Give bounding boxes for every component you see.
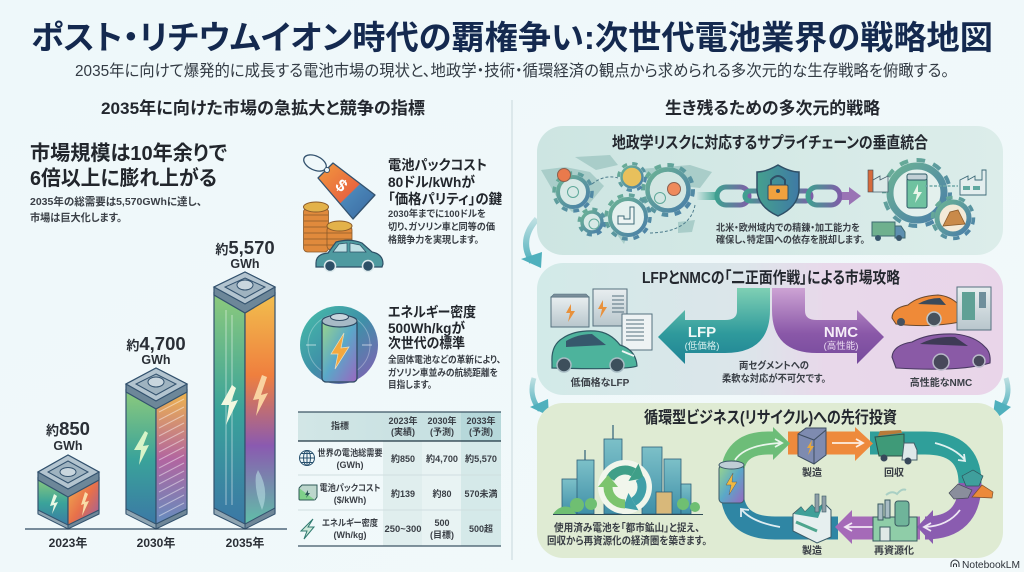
icon: factory right (960, 170, 986, 195)
table row: energy density: 500 (434, 518, 450, 528)
panel description: 確保し、特定国への依存を脱却します。 (716, 234, 865, 246)
icon: green car (552, 331, 637, 372)
icon: price tag with coins and car (301, 152, 383, 272)
table row: energy density: (Wh/kg) (334, 530, 366, 540)
loop white highlights (735, 439, 965, 531)
table header: (実績) (391, 426, 415, 437)
icon: LFP batteries (551, 289, 652, 350)
icon: battery cell (798, 428, 826, 464)
left section heading: 2035年に向けた市場の急拡大と競争の指標 (101, 98, 425, 118)
text: energy density: ガソリン車並みの航続距離を (388, 367, 498, 379)
text: pack cost: 電池パックコスト (388, 157, 487, 173)
table row: demand: 約4,700 (426, 453, 458, 464)
year axis labels: 2035年 (226, 535, 264, 550)
text: energy density: 全固体電池などの革新により、 (388, 354, 501, 366)
subtitle: 2035年に向けて爆発的に成長する電池市場の現状と、地政学・技術・循環経済の観点から求められる多次元的な生存戦略を俯瞰する。 (75, 62, 949, 80)
arrow: LFP: (低価格) (685, 340, 719, 352)
bar: 2023 battery (38, 455, 99, 529)
icon: truck (875, 430, 917, 464)
icon: city skyline with recycling symbol (553, 425, 703, 515)
label: manufacture bottom: 製造 (802, 544, 822, 557)
panel: recycling (537, 403, 1003, 558)
bar: 2030 battery (126, 368, 187, 529)
bar value labels: 約5,570 (215, 237, 275, 258)
table header: 2030年 (427, 415, 457, 426)
icon: gears right with battery (884, 160, 974, 238)
text: energy density: 目指します。 (388, 379, 432, 391)
panel heading: 地政学リスクに対応するサプライチェーンの垂直統合 (612, 133, 928, 152)
arrow: NMC (772, 288, 884, 364)
description: 使用済み電池を「都市鉱山」と捉え、 (554, 521, 700, 534)
label: collection: 回収 (884, 467, 904, 479)
bar value labels: GWh (53, 439, 83, 453)
icon: price tag with coins and car: $ (332, 175, 351, 196)
recycling loop (732, 443, 970, 528)
table: indicators (298, 412, 501, 546)
table row: pack cost: 電池パックコスト (320, 482, 380, 493)
table row: demand: 世界の電池総需要 (318, 447, 382, 458)
text: energy density: 次世代の標準 (388, 335, 465, 351)
year axis labels: 2023年 (49, 535, 87, 550)
icon: dashed flow arrow (925, 185, 958, 187)
right section heading: 生き残るための多次元的戦略 (665, 98, 880, 118)
market description: 2035年の総需要は5,570GWhに達し、 (30, 195, 202, 208)
bar value labels: GWh (230, 257, 260, 271)
table header: 2033年 (466, 415, 496, 426)
table row: demand: 約5,570 (465, 453, 497, 464)
logo: NotebookLM: NotebookLM (962, 560, 1020, 571)
world map (541, 155, 712, 244)
year axis labels (49, 535, 264, 550)
arrow: panel 1 to panel 2 (521, 219, 542, 268)
icon: charging cabinet (957, 287, 991, 330)
table row: energy density: エネルギー密度 (322, 517, 378, 528)
table row: demand (318, 447, 497, 470)
text: pack cost: 切り、ガソリン車と同等の価 (388, 221, 495, 233)
market heading: 6倍以上に膨れ上がる (30, 166, 217, 190)
market heading: 市場規模は10年余りで (30, 142, 227, 165)
icon: globe (300, 450, 314, 466)
connector dashes (592, 177, 695, 233)
text: pack cost: 80ドル/kWhが (388, 174, 475, 190)
text: energy density (388, 304, 501, 391)
table header: 2023年 (388, 415, 418, 426)
bar value labels: 約4,700 (126, 333, 186, 354)
table row: energy density: 500超 (469, 523, 493, 534)
label: recycling materials: 再資源化 (874, 544, 914, 557)
label: manufacture top: 製造 (802, 466, 822, 479)
table row: pack cost: 約139 (391, 488, 415, 499)
table row: energy density (322, 517, 493, 540)
label: low price LFP: 低価格なLFP (571, 376, 630, 389)
chart baseline (25, 528, 287, 530)
title: ポスト・リチウムイオン時代の覇権争い:次世代電池業界の戦略地図 (31, 19, 993, 56)
icon: battery pack (299, 485, 317, 500)
bar value labels: GWh (141, 353, 171, 367)
market description: 市場は巨大化します。 (30, 211, 122, 224)
icon: orange car (892, 295, 960, 326)
arrow: panel 2 to panel 3 left (530, 378, 549, 416)
text: energy density: 500Wh/kgが (388, 320, 465, 336)
text: energy density: エネルギー密度 (388, 304, 476, 320)
table row: demand: (GWh) (336, 460, 364, 470)
panel description: 北米・欧州域内での精錬・加工能力を (716, 222, 860, 234)
panel: market growth (25, 142, 287, 550)
caption (722, 359, 826, 385)
arrow: NMC: NMC (824, 324, 858, 341)
arrow: LFP (658, 288, 770, 364)
description (547, 521, 707, 547)
table row: pack cost (320, 482, 498, 505)
table header: 指標 (331, 420, 349, 431)
icon: energy density battery (300, 306, 378, 384)
icon: purple arrow (842, 187, 861, 205)
icon: factory left (868, 170, 888, 192)
arrow: panel 2 to panel 3 right (992, 378, 1011, 422)
table row: pack cost: 約80 (432, 488, 452, 499)
market heading (30, 142, 227, 190)
icon: shield with lock (757, 165, 799, 216)
text: pack cost: 「価格パリティ」の鍵 (388, 191, 502, 207)
table row: energy density: (目標) (430, 529, 454, 540)
caption: 両セグメントへの (739, 359, 809, 372)
label: high performance NMC: 高性能なNMC (910, 376, 972, 389)
text: pack cost (388, 157, 502, 246)
panel heading: LFPとNMCの「二正面作戦」による市場攻略 (642, 268, 900, 287)
arrow: NMC: (高性能) (824, 340, 858, 352)
panel description (716, 222, 865, 246)
panel: LFP and NMC (537, 263, 1003, 395)
panel heading: 循環型ビジネス(リサイクル)への先行投資 (644, 407, 897, 427)
icon: gears left (554, 164, 693, 239)
table header (331, 415, 496, 437)
icon: purple car (892, 334, 990, 370)
panel: supply chain (537, 126, 1003, 255)
bar: 2035 battery (214, 272, 275, 529)
arrow: LFP: LFP (688, 324, 716, 341)
text: pack cost: 2030年までに100ドルを (388, 208, 486, 220)
icon: chain (717, 187, 840, 205)
loop arrowheads (773, 427, 933, 544)
table row: pack cost: 570未満 (464, 488, 498, 499)
icon: truck (872, 222, 905, 241)
text: pack cost: 格競争力を実現します。 (388, 234, 479, 246)
table header: (予測) (430, 426, 454, 437)
icon: loop battery (719, 461, 744, 503)
bar value labels (46, 237, 275, 453)
arrow band (697, 192, 717, 200)
description: 回収から再資源化の経済圏を築きます。 (547, 534, 707, 547)
table row: energy density: 250~300 (384, 524, 422, 534)
bar value labels: 約850 (46, 418, 90, 439)
icon: ore rocks (949, 470, 993, 499)
caption: 柔軟な対応が不可欠です。 (722, 372, 826, 385)
table row: pack cost: ($/kWh) (334, 495, 366, 505)
icon: lightning bolt (301, 519, 314, 539)
year axis labels: 2030年 (137, 535, 175, 550)
icon: refinery (873, 490, 917, 541)
icon: factory (793, 494, 831, 543)
table row: demand: 約850 (391, 453, 415, 464)
market description (30, 195, 202, 224)
table header: (予測) (469, 426, 493, 437)
